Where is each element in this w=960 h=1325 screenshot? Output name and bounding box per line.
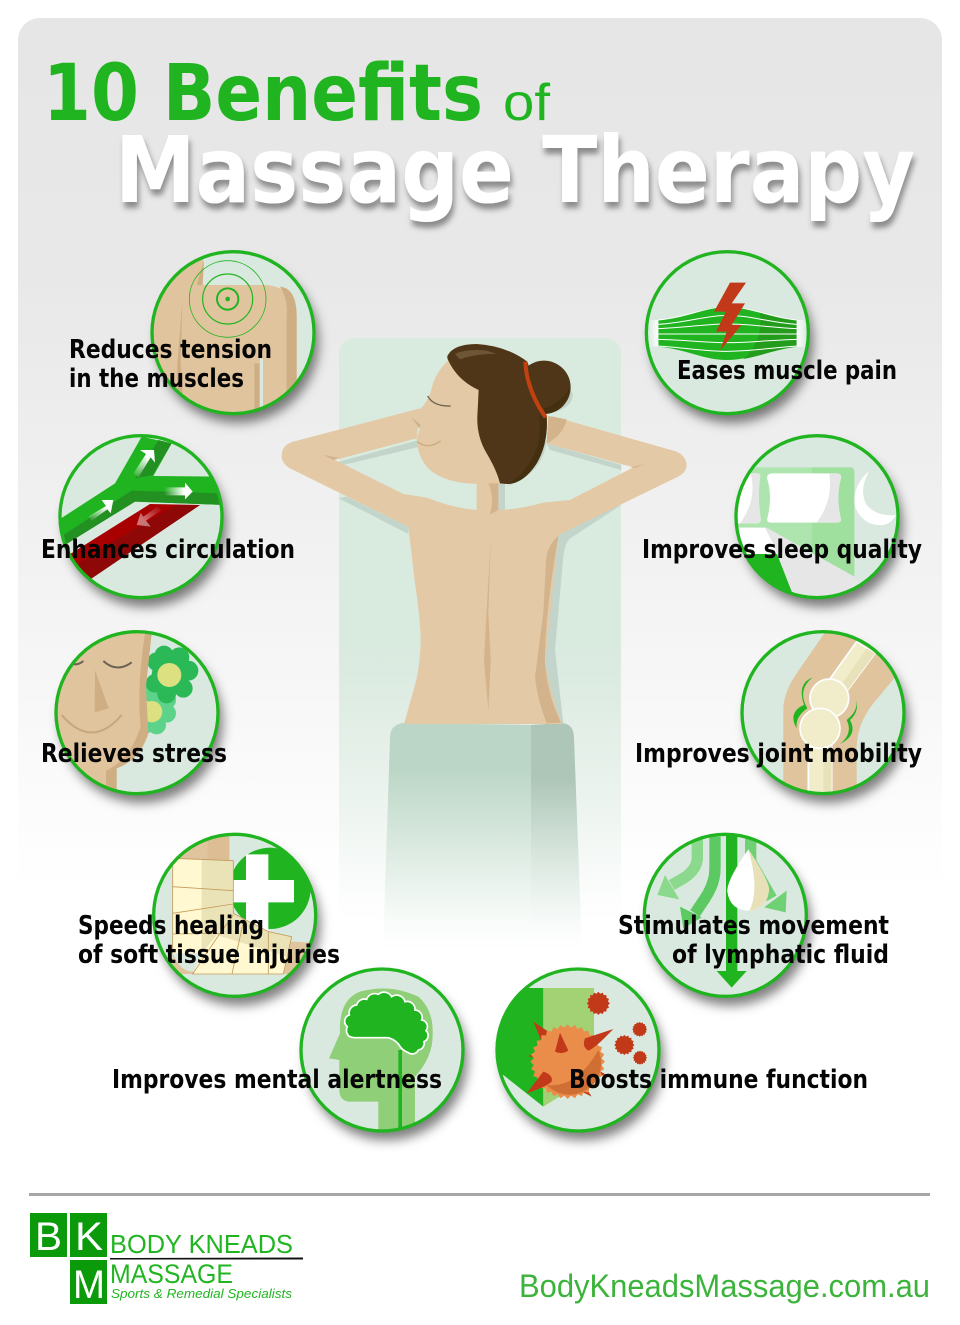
logo tiles: M: [73, 1263, 105, 1307]
label: of soft tissue injuries: [78, 940, 340, 970]
benefit: improves mental alertness: [112, 969, 463, 1133]
icon: blood vessels: [53, 436, 227, 598]
icon: knee joint: [742, 630, 907, 797]
label: [78, 911, 340, 970]
icon: bandaged limb and cross: [154, 834, 316, 996]
label: Improves joint mobility: [635, 739, 922, 769]
logo: [30, 1213, 303, 1307]
label: Eases muscle pain: [677, 356, 897, 386]
hair bun: [517, 361, 571, 414]
icon: bed and moon: [733, 436, 898, 600]
mouth: [417, 441, 441, 446]
body and arms: [282, 408, 687, 724]
icon: arrows and droplet: [644, 833, 806, 996]
icon: head and brain: [301, 969, 463, 1133]
website url: BodyKneadsMassage.com.au: [519, 1268, 930, 1304]
icon: shield and virus: [490, 969, 659, 1131]
label: of lymphatic fluid: [672, 940, 889, 970]
logo tiles: B: [35, 1215, 62, 1259]
benefit: enhances circulation: [41, 436, 295, 598]
label: Stimulates movement: [618, 911, 889, 941]
cast shadow: [339, 383, 621, 723]
icon: muscle and lightning: [646, 252, 808, 414]
title: [43, 49, 915, 224]
logo tiles: [30, 1213, 107, 1307]
benefit: boosts immune function: [490, 969, 868, 1131]
benefit: eases muscle pain: [646, 252, 897, 414]
towel: [383, 723, 582, 950]
title line: 10 Benefits of: of: [503, 74, 551, 132]
skin shading: [323, 416, 645, 723]
label: [618, 911, 889, 970]
label: Relieves stress: [41, 739, 227, 769]
logo wordmark: BODY KNEADS: [110, 1229, 293, 1259]
benefit: relieves stress: [41, 632, 227, 797]
label: Boosts immune function: [569, 1065, 868, 1095]
label: Speeds healing: [78, 911, 264, 941]
benefit: improves joint mobility: [635, 630, 922, 797]
logo wordmark: [110, 1229, 303, 1301]
label: Enhances circulation: [41, 535, 295, 565]
hair: [447, 344, 547, 484]
label: Reduces tension: [69, 335, 272, 365]
benefit: stimulates lymphatic movement: [618, 833, 889, 996]
massage table: [339, 338, 621, 953]
background panel: [18, 18, 942, 1018]
label: Improves mental alertness: [112, 1065, 442, 1095]
footer divider: [29, 1193, 930, 1196]
benefit: speeds healing: [78, 834, 340, 996]
title line: 10 Benefits of: 10 Benefits: [43, 49, 483, 139]
hair band: [525, 362, 546, 417]
benefit: reduces tension: [69, 250, 314, 420]
icon: shoulder target: [147, 250, 314, 420]
eye: [428, 396, 451, 406]
label: in the muscles: [69, 364, 244, 394]
icon: relaxed face and flowers: [50, 632, 218, 797]
logo wordmark: Sports & Remedial Specialists: [111, 1286, 293, 1301]
benefit: improves sleep quality: [642, 436, 922, 600]
woman lying face-up view: [282, 344, 687, 724]
logo tiles: K: [75, 1215, 103, 1259]
logo wordmark: MASSAGE: [110, 1259, 233, 1289]
label: [69, 335, 272, 394]
head: [412, 360, 513, 484]
